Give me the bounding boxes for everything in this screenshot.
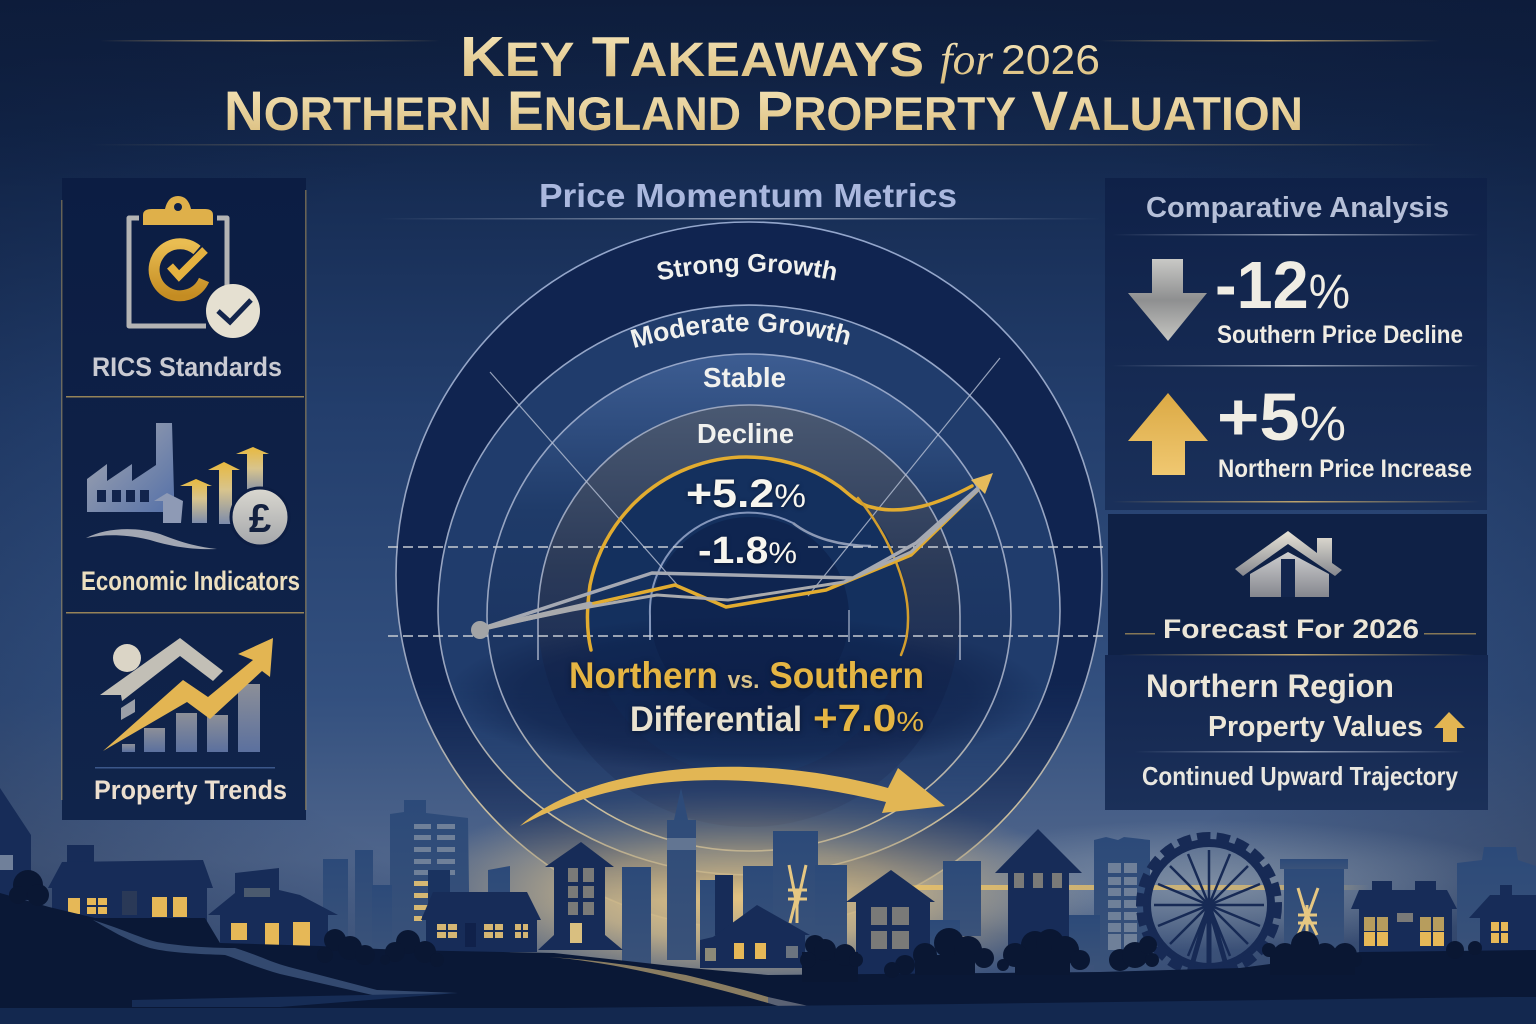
trend chart lines and gold arc [480,457,978,655]
differential callout [569,655,924,740]
stat: northern increase: +5% [1217,380,1346,455]
gauge band labels: Moderate Growth [630,313,850,348]
title [90,25,1440,146]
panel: forecast [1105,514,1488,810]
skyline: building windows (distant) [414,824,1137,950]
gauge values [686,472,806,572]
stat: northern increase: Northern Price Increase [1218,455,1472,483]
icon: house [1235,531,1342,597]
differential callout: Differential [630,700,802,739]
label: property trends: Property Trends [94,775,287,805]
skyline: distant buildings [323,788,1536,970]
chart start point [471,621,489,639]
icon: small up arrow [1434,712,1465,742]
title: KEY TAKEAWAYS [460,25,924,89]
ferris wheel [1142,838,1276,972]
title: NORTHERN ENGLAND PROPERTY VALUATION [224,79,1303,142]
icon: up arrow [1128,393,1208,475]
title: for [940,35,994,84]
chart arrowhead [971,473,993,494]
gauge band labels: Strong Growth [657,254,836,280]
text: northern region: Northern Region [1146,668,1394,704]
stat: southern decline [1215,248,1463,349]
text: continued upward trajectory: Continued Upward Trajectory [1142,761,1458,791]
heading: forecast for 2026: Forecast For 2026 [1163,614,1419,644]
decorative gold star glyphs [788,865,1318,935]
heading: price momentum metrics: Price Momentum Metrics [539,177,957,214]
icon: factory, rising arrows and pound coin [86,423,289,549]
gauge band labels: Stable [703,362,786,393]
gauge band labels: Decline [697,418,794,449]
skyline: houses and towers [0,788,1536,980]
icon: house and trend arrow [100,638,273,752]
radial momentum gauge [388,222,1103,928]
text: property values: Property Values [1208,711,1423,743]
icon: down arrow [1128,259,1207,341]
label: rics standards: RICS Standards [92,352,282,382]
gauge values: +5.2 % [686,472,806,516]
stat: southern decline: Southern Price Decline [1217,321,1463,349]
large curved gold arrow [520,767,945,826]
heading: comparative analysis: Comparative Analysis [1146,192,1449,224]
stat: southern decline: -12% [1215,248,1350,323]
stat: northern increase [1217,380,1472,483]
foreground ground, trees and road [0,870,1536,1024]
icon: clipboard with check [129,196,260,338]
differential callout: Northern vs. Southern [569,655,924,696]
label: economic indicators: Economic Indicators [81,566,300,596]
gauge values: -1.8% [698,530,797,572]
skyline: lit and dim windows [0,855,1508,967]
gauge band labels [630,254,850,449]
title: 2026 [1001,36,1100,83]
differential callout: +7.0 % [813,698,924,740]
panel: comparative analysis [1105,178,1487,510]
panel: left column [61,178,306,820]
icon: factory, rising arrows and pound coin: £ [249,497,271,541]
